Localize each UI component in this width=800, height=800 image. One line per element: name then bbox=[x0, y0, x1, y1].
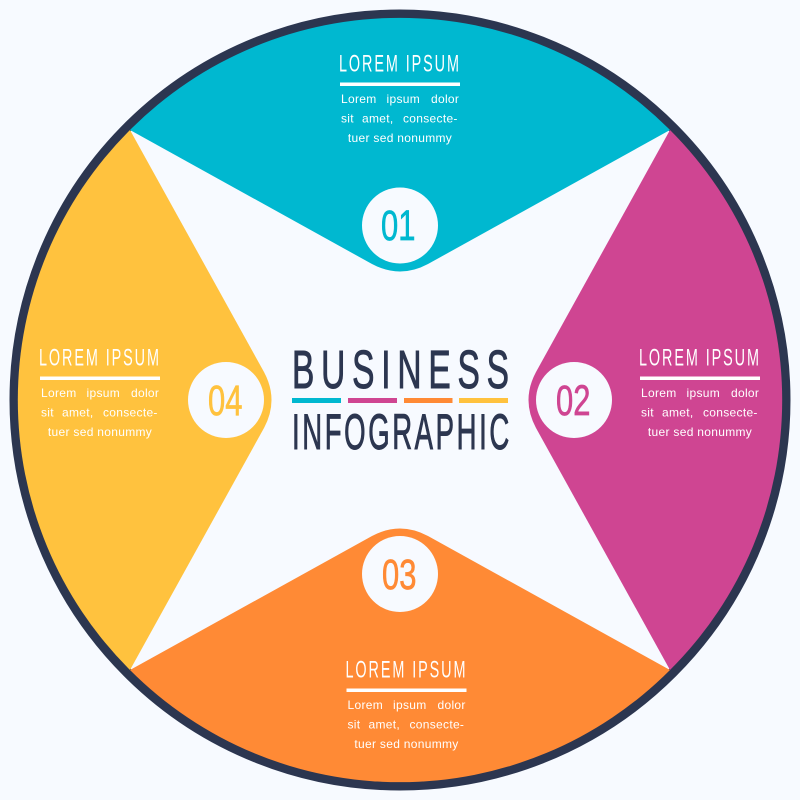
body text 01 bbox=[341, 92, 459, 145]
body text 03: tuer sed nonummy bbox=[354, 737, 459, 751]
body text 04 bbox=[41, 386, 159, 439]
segment shape 04 bbox=[18, 130, 271, 670]
body text 03: dolor bbox=[438, 698, 466, 712]
body text 01: amet, bbox=[362, 112, 394, 126]
body text 02: Lorem bbox=[641, 386, 677, 400]
segment shape 01 bbox=[130, 18, 670, 271]
panel: 03 orange bbox=[130, 528, 670, 782]
underline 02 bbox=[640, 376, 760, 380]
underline 03 bbox=[346, 688, 466, 692]
body text 03: amet, bbox=[368, 718, 400, 732]
body text 03: sit bbox=[348, 718, 361, 732]
body text 01: sit bbox=[341, 112, 354, 126]
underline 04 bbox=[40, 376, 160, 380]
body text 03: Lorem bbox=[348, 698, 383, 712]
panel: 01 teal bbox=[130, 18, 670, 271]
body text 02: ipsum bbox=[686, 386, 720, 400]
body text 02: tuer sed nonummy bbox=[648, 425, 752, 439]
number badge 01: 01 bbox=[381, 201, 415, 249]
body text 04: consecte- bbox=[103, 406, 158, 420]
body text 04: sit bbox=[41, 406, 54, 420]
body text 01: ipsum bbox=[386, 92, 420, 106]
body text 01: dolor bbox=[431, 92, 459, 106]
body text 01: consecte- bbox=[403, 112, 458, 126]
body text 01: Lorem bbox=[341, 92, 377, 106]
title line: INFOGRAPHIC: INFOGRAPHIC bbox=[292, 403, 509, 460]
number badge 04: 04 bbox=[208, 376, 242, 424]
body text 04: tuer sed nonummy bbox=[48, 425, 152, 439]
center title bbox=[292, 339, 509, 460]
number badge 02 bbox=[536, 362, 612, 438]
number badge 03: 03 bbox=[382, 550, 416, 598]
body text 04: ipsum bbox=[86, 386, 120, 400]
body text 02: consecte- bbox=[703, 406, 758, 420]
body text 03 bbox=[348, 698, 466, 751]
body text 02: sit bbox=[641, 406, 654, 420]
body text 04: dolor bbox=[131, 386, 159, 400]
number badge 04 bbox=[188, 362, 264, 438]
number badge 01 bbox=[362, 188, 438, 264]
title line: BUSINESS: BUSINESS bbox=[292, 339, 509, 400]
heading 01: LOREM IPSUM bbox=[339, 51, 459, 78]
body text 02: dolor bbox=[731, 386, 759, 400]
underline 01 bbox=[340, 82, 460, 86]
body text 02: amet, bbox=[662, 406, 694, 420]
body text 03: ipsum bbox=[393, 698, 427, 712]
panel: 02 magenta bbox=[528, 130, 782, 670]
heading 04: LOREM IPSUM bbox=[39, 345, 159, 372]
body text 04: Lorem bbox=[41, 386, 77, 400]
color bars bbox=[292, 398, 508, 403]
body text 01: tuer sed nonummy bbox=[348, 131, 452, 145]
heading 03: LOREM IPSUM bbox=[346, 657, 465, 684]
segment shape 02 bbox=[528, 130, 782, 670]
body text 02 bbox=[641, 386, 759, 439]
segment shape 03 bbox=[130, 528, 670, 782]
body text 03: consecte- bbox=[410, 718, 464, 732]
number badge 02: 02 bbox=[556, 376, 590, 424]
panel: 04 yellow bbox=[18, 130, 271, 670]
number badge 03 bbox=[362, 536, 438, 612]
body text 04: amet, bbox=[62, 406, 94, 420]
heading 02: LOREM IPSUM bbox=[639, 345, 759, 372]
